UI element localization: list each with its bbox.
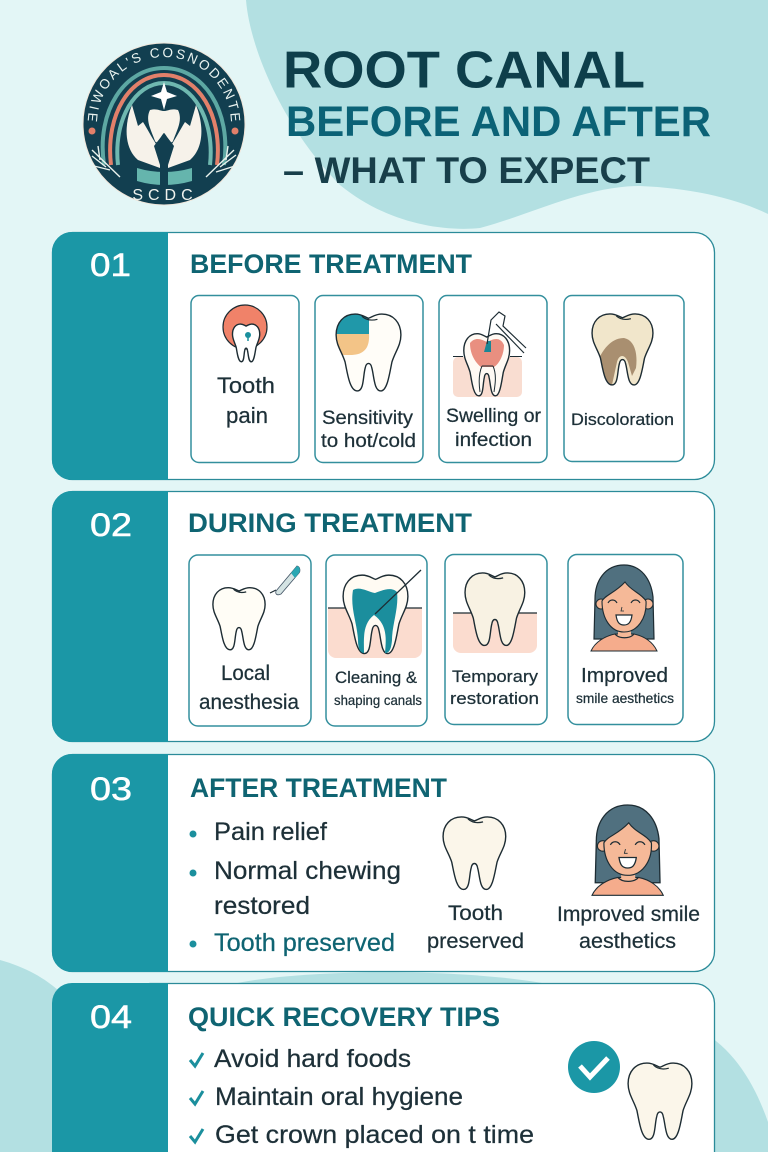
title: BEFORE AND AFTER [286,98,711,146]
logo ring lettering [97,57,231,124]
checklist: Maintain oral hygiene [215,1083,463,1111]
label: temporary restoration: Temporary [452,667,539,686]
panel: after treatment: AFTER TREATMENT [190,773,447,803]
icon: smiling person large [592,805,663,895]
panel: after treatment: 03 [90,771,132,807]
logo tooth [148,109,180,142]
label: discoloration: Discoloration [571,410,674,429]
label: improved smile aesthetics: Improved [581,665,668,687]
icon: healthy tooth [628,1063,692,1139]
panel: during treatment: 02 [90,507,132,543]
panel: after treatment: preserved [427,930,524,953]
bullet list: restored [214,892,310,920]
panel: quick recovery tips: QUICK RECOVERY TIPS [188,1002,500,1032]
panel: quick recovery tips: 04 [90,999,132,1035]
label: sensitivity: Sensitivity [322,408,414,429]
checklist: Get crown placed on t time [215,1121,534,1149]
icon: check badge [568,1041,620,1093]
bullet list: Pain relief [214,818,327,846]
panel: during treatment [52,491,714,742]
panel: before treatment [52,232,714,480]
panel: after treatment [52,754,714,972]
logo hands [127,105,201,168]
label: cleaning and shaping: Cleaning & [335,668,418,687]
logo: ƎIWOAL'S COSNODENTE [88,48,240,122]
title [283,42,711,191]
bullet list: Tooth preserved [214,929,395,957]
panel: before treatment: BEFORE TREATMENT [190,249,472,279]
panel: before treatment: pain [226,403,268,428]
label: tooth preserved: Tooth [448,902,503,925]
panel: before treatment: to hot/cold [321,431,416,452]
title: – WHAT TO EXPECT [283,150,650,191]
icon: sensitivity tooth [330,310,401,391]
title: ROOT CANAL [283,42,645,100]
logo [82,42,246,206]
checklist: Avoid hard foods [214,1045,411,1073]
bullet list [190,818,401,957]
label: tooth pain: Tooth [217,373,275,398]
logo star [151,82,177,110]
panel: before treatment: 01 [90,247,131,283]
panel: before treatment: infection [455,430,532,451]
panel: during treatment: restoration [450,689,539,708]
panel: during treatment: DURING TREATMENT [188,508,473,538]
icon: cleaning canals [328,570,422,658]
logo sub lettering: SCDC [132,187,198,204]
panel: quick recovery tips [52,983,714,1152]
bullet list: Normal chewing [214,857,401,885]
icon: smiling person [591,565,657,651]
icon: tooth pain [223,305,267,362]
panel: after treatment: aesthetics [579,930,676,953]
logo dots [88,128,238,134]
checklist [190,1045,534,1149]
panel: during treatment: smile aesthetics [576,690,674,706]
logo stem [154,133,174,188]
logo rainbow arcs [103,68,225,165]
panel: during treatment: shaping canals [334,692,422,708]
panel: during treatment: anesthesia [199,691,299,714]
icon: discolored tooth [592,314,653,385]
logo laurels [90,146,238,177]
label: improved smile: Improved smile [557,903,700,926]
label: swelling: Swelling or [446,406,542,427]
icon: anesthesia tooth and syringe [213,566,300,650]
icon: swelling tooth [453,312,526,397]
icon: temporary restoration tooth [453,573,537,653]
label: local anesthesia: Local [221,662,270,685]
logo band [137,168,192,185]
icon: preserved tooth [443,817,506,889]
